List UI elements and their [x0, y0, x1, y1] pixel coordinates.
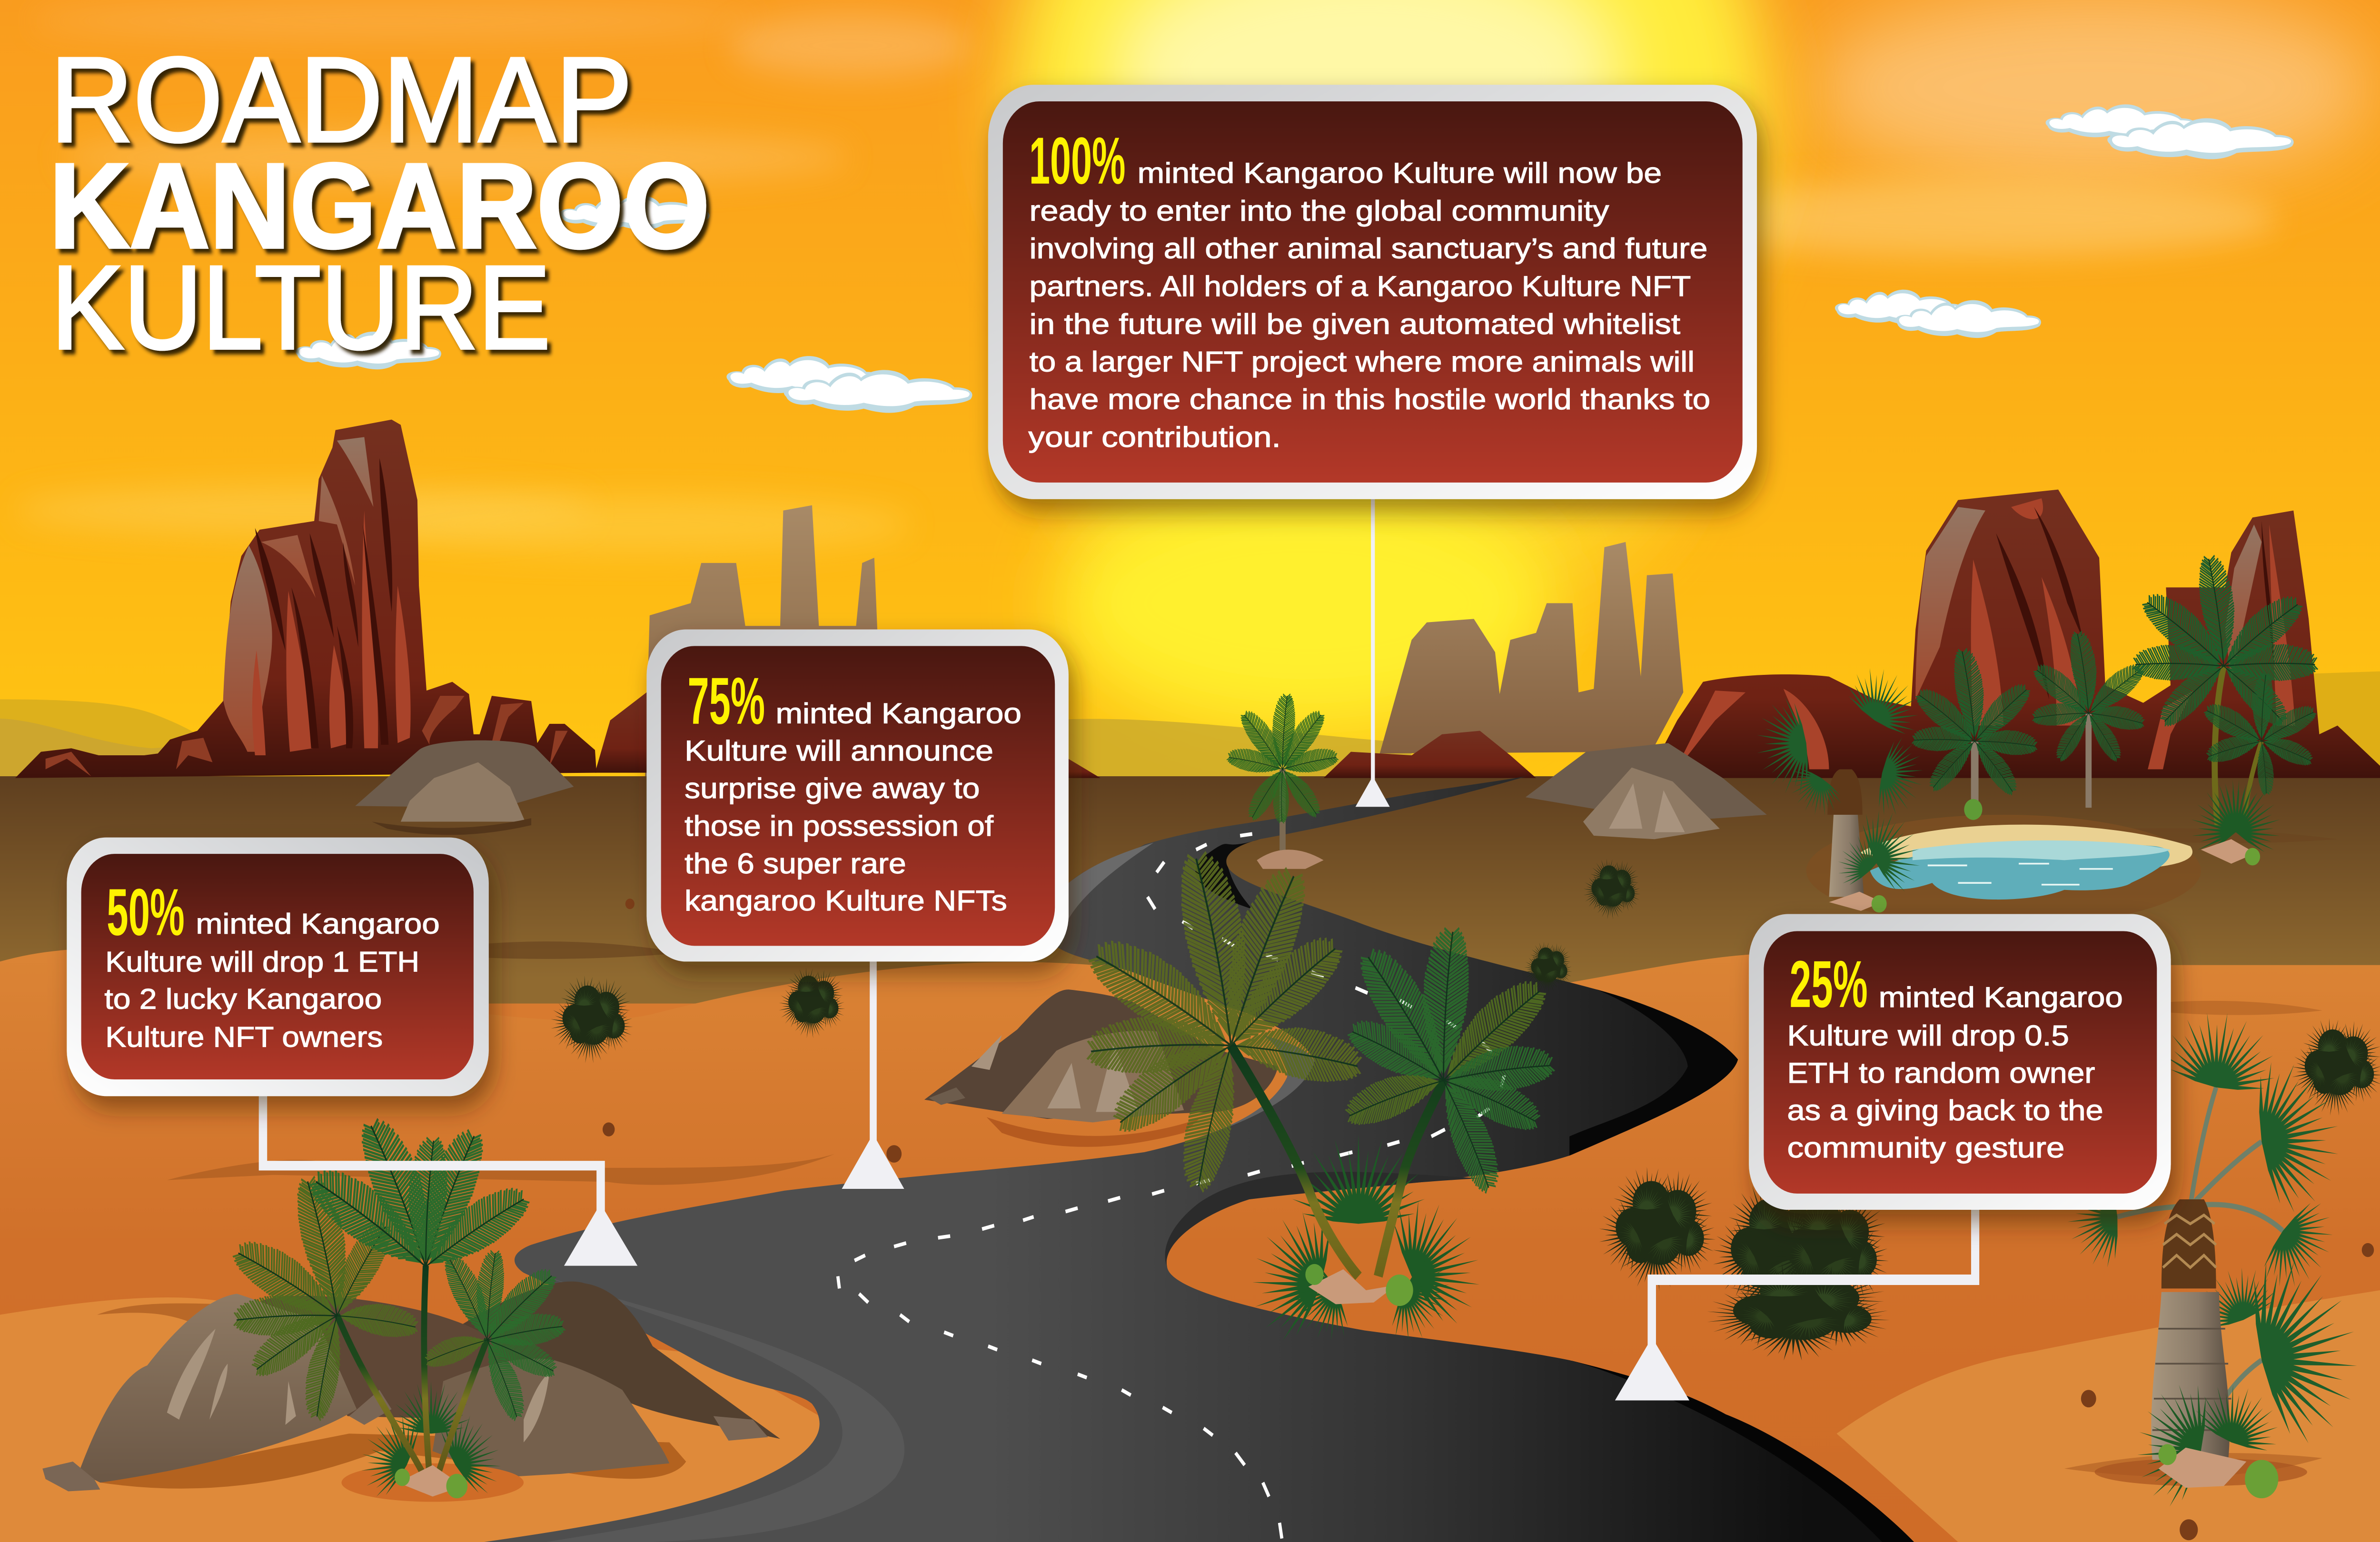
connector: 50% card to road [259, 1093, 637, 1266]
panel: 25% minted [1749, 914, 2171, 1210]
connector: 25% card to road [1615, 1206, 1979, 1400]
text: 50% milestone description: minted Kangaroo [196, 908, 440, 939]
text: 25% milestone description: as a giving back to the [1787, 1094, 2103, 1126]
text: 100% milestone description: your contribution. [1028, 421, 1281, 453]
centre palm grass [1236, 1135, 1500, 1355]
panel: 100% minted [988, 85, 1757, 499]
text: 25% milestone description: Kulture will drop 0.5 [1787, 1019, 2069, 1052]
text: 50% milestone description: Kulture will drop 1 ETH [105, 946, 419, 978]
title [50, 32, 710, 374]
text: 75% milestone description: kangaroo Kulture NFTs [684, 885, 1007, 917]
oasis pond [1806, 815, 2201, 927]
text: 100% milestone description: involving all other animal sanctuary’s and future [1030, 232, 1707, 264]
title: ROADMAP [50, 32, 632, 167]
text: 25% milestone description: minted Kangaroo [1879, 981, 2123, 1013]
text: 100% milestone description [1028, 157, 1710, 453]
text: 25% milestone description: ETH to random owner [1787, 1057, 2095, 1089]
percent 50%: 50% [107, 875, 185, 949]
text: 100% milestone description: have more chance in this hostile world thanks to [1030, 383, 1710, 415]
text: 75% milestone description: minted Kangaroo [775, 697, 1021, 729]
palm base grass [348, 1381, 515, 1504]
clouds [296, 104, 2294, 413]
ground and sand [0, 776, 2380, 1542]
text: 100% milestone description: partners. All holders of a Kangaroo Kulture NFT [1030, 270, 1691, 302]
text: 75% milestone description: those in possession of [684, 810, 993, 842]
text: 75% milestone description: the 6 super rare [684, 847, 906, 880]
sky background [0, 0, 2380, 787]
red rock at centre left and low centre range [595, 685, 1536, 778]
text: 75% milestone description: Kulture will announce [684, 734, 993, 767]
centre palm trees over road [1082, 848, 1556, 1355]
bushes [547, 853, 2380, 1365]
text: 100% milestone description: in the future will be given automated whitelist [1030, 308, 1680, 340]
grey rock mounds far [355, 741, 1767, 839]
small far palm tree [1226, 694, 1339, 869]
bottom left palm trees [228, 1110, 566, 1504]
desert tufts [603, 899, 2374, 1540]
text: 50% milestone description: Kulture NFT owners [105, 1021, 383, 1053]
percent 100%: 100% [1029, 124, 1125, 198]
connector: 100% card to road [1356, 496, 1390, 807]
left red mesa [15, 420, 596, 778]
road centre dashes [838, 834, 1504, 1539]
percent 25%: 25% [1790, 947, 1868, 1021]
rock mound: centre [924, 989, 1278, 1147]
text: 100% milestone description: ready to enter into the global community [1030, 195, 1609, 227]
oasis feather palm fronds [1912, 554, 2319, 799]
text: 50% milestone description: to 2 lucky Kangaroo [104, 983, 382, 1015]
text: 50% milestone description [104, 908, 440, 1053]
text: 25% milestone description [1787, 981, 2123, 1164]
panel: 50% minted [67, 838, 489, 1096]
text: 75% milestone description [684, 697, 1021, 917]
title: KANGAROO [50, 138, 710, 273]
road [484, 776, 1914, 1542]
panel: 75% minted [646, 629, 1069, 961]
far mesas silhouettes [645, 505, 1683, 778]
text: 75% milestone description: surprise give away to [684, 772, 980, 804]
text: 100% milestone description: to a larger NFT project where more animals will [1030, 346, 1695, 377]
title: KULTURE [51, 241, 551, 374]
oasis palms [1749, 554, 2319, 913]
rock mound: bottom left [42, 1282, 780, 1491]
text: 100% milestone description: minted Kangaroo Kulture will now be [1138, 157, 1662, 189]
percent 75%: 75% [688, 664, 765, 738]
text: 25% milestone description: community gesture [1787, 1131, 2064, 1164]
connector: 75% card to road [842, 958, 904, 1189]
oasis fan palm fronds [1749, 652, 1934, 899]
right red mesas [1647, 490, 2380, 778]
big right palm tree [2064, 1002, 2375, 1512]
